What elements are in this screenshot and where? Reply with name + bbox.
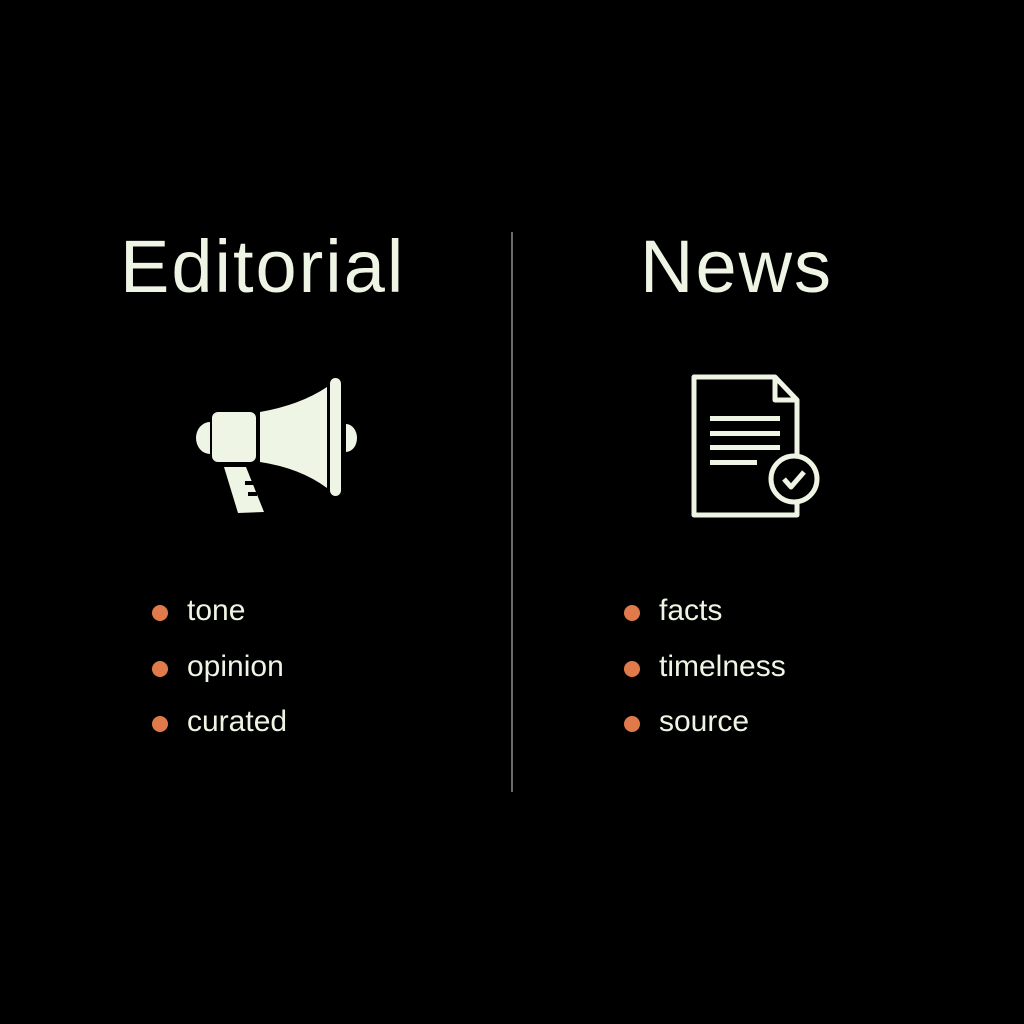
list: news traits: facts: [659, 594, 722, 627]
list: editorial traits: tone: [187, 594, 245, 627]
list: editorial traits: [152, 594, 287, 738]
title: Editorial: Editorial: [120, 225, 405, 308]
divider: [511, 232, 513, 792]
list: editorial traits: opinion: [187, 650, 284, 682]
list: news traits: [624, 594, 786, 738]
list: news traits: timelness: [659, 650, 786, 682]
list: editorial traits: curated: [187, 705, 287, 738]
list: news traits: source: [659, 705, 749, 738]
title: News: News: [640, 225, 833, 308]
